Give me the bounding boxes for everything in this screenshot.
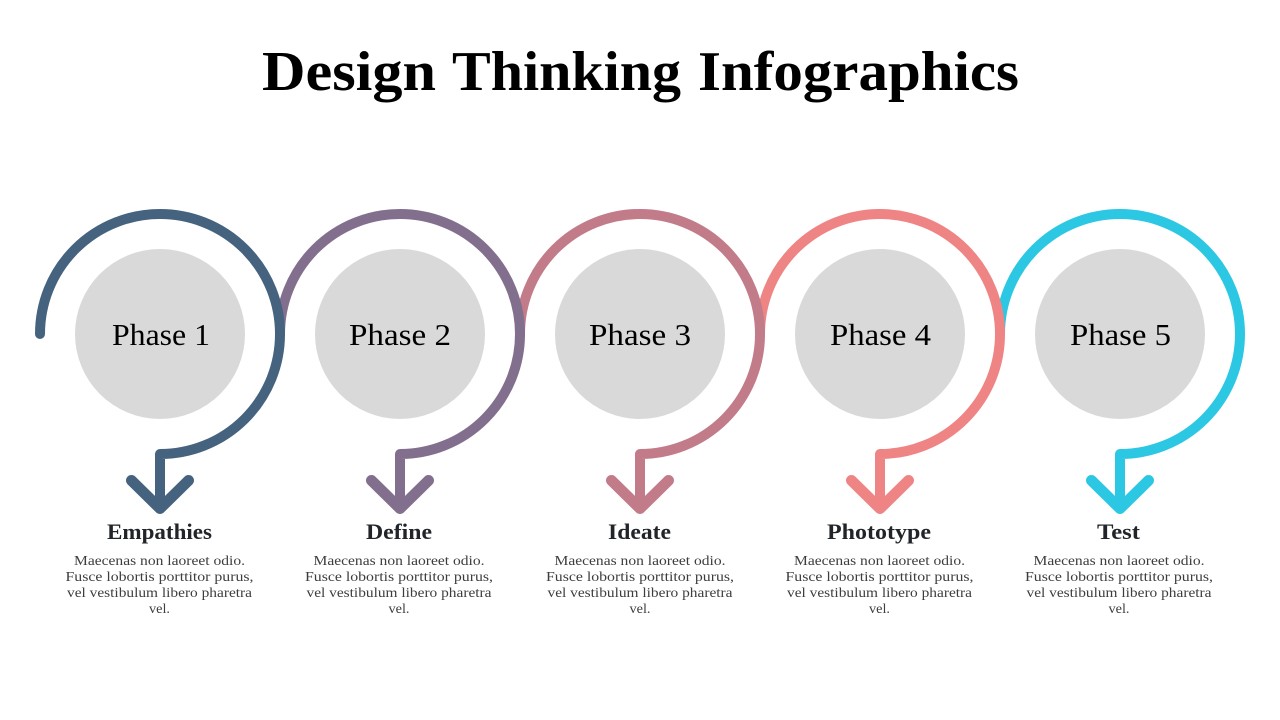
phase 5 badge — [1035, 249, 1205, 419]
text block: Empathies: vel. — [149, 601, 170, 616]
phase 5 badge: Phase 5 — [1070, 317, 1171, 352]
text block: Define — [305, 519, 493, 616]
text block: Define: vel vestibulum libero pharetra — [306, 585, 492, 600]
text block: Test: vel. — [1108, 601, 1130, 616]
text block: Ideate: Ideate — [608, 519, 671, 544]
text block: Phototype: Fusce lobortis porttitor purus, — [786, 569, 974, 584]
text block: Define: Fusce lobortis porttitor purus, — [305, 569, 493, 584]
phase 4 badge — [795, 249, 965, 419]
title: Infographics — [698, 41, 1019, 103]
arrow: phase 2 spiral — [280, 214, 520, 508]
text block: Phototype: Phototype — [827, 519, 931, 544]
text block: Ideate: vel vestibulum libero pharetra — [548, 585, 733, 600]
phase 1 badge: Phase 1 — [112, 317, 210, 352]
phase 4 badge: Phase 4 — [830, 317, 932, 352]
text block: Define: Define — [366, 519, 432, 544]
text block: Empathies: Empathies — [107, 519, 212, 544]
text block: Empathies: Maecenas non laoreet odio. — [74, 553, 245, 568]
text block: Test: Maecenas non laoreet odio. — [1034, 553, 1204, 568]
phase 2 badge — [315, 249, 485, 419]
title: Design — [262, 41, 436, 103]
text block: Ideate: Fusce lobortis porttitor purus, — [546, 569, 734, 584]
text block: Test: Test — [1097, 519, 1141, 544]
text block: Empathies: vel vestibulum libero pharetra — [67, 585, 252, 600]
phase 1 badge — [75, 249, 245, 419]
text block: Define: vel. — [388, 601, 410, 616]
text block: Test — [1025, 519, 1213, 616]
phase 3 badge — [555, 249, 725, 419]
text block: Ideate: Maecenas non laoreet odio. — [554, 553, 726, 568]
text block: Phototype: vel vestibulum libero pharetra — [787, 585, 972, 600]
text block: Phototype: Maecenas non laoreet odio. — [794, 553, 965, 568]
text block: Define: Maecenas non laoreet odio. — [314, 553, 484, 568]
text block: Empathies: Fusce lobortis porttitor purus, — [66, 569, 253, 584]
arrow: phase 5 spiral — [1000, 214, 1240, 508]
text block: Empathies — [66, 519, 253, 616]
text block: Phototype: vel. — [869, 601, 890, 616]
text block: Test: Fusce lobortis porttitor purus, — [1025, 569, 1213, 584]
title: Thinking — [452, 41, 681, 103]
arrow: phase 1 spiral — [40, 214, 280, 508]
text block: Ideate — [546, 519, 734, 616]
arrow: phase 3 spiral — [520, 214, 760, 508]
text block: Test: vel vestibulum libero pharetra — [1026, 585, 1212, 600]
phase 2 badge: Phase 2 — [349, 317, 451, 352]
phase 3 badge: Phase 3 — [589, 317, 691, 352]
text block: Ideate: vel. — [630, 601, 650, 616]
arrow: phase 4 spiral — [760, 214, 1000, 508]
title — [262, 41, 1019, 103]
text block: Phototype — [786, 519, 974, 616]
